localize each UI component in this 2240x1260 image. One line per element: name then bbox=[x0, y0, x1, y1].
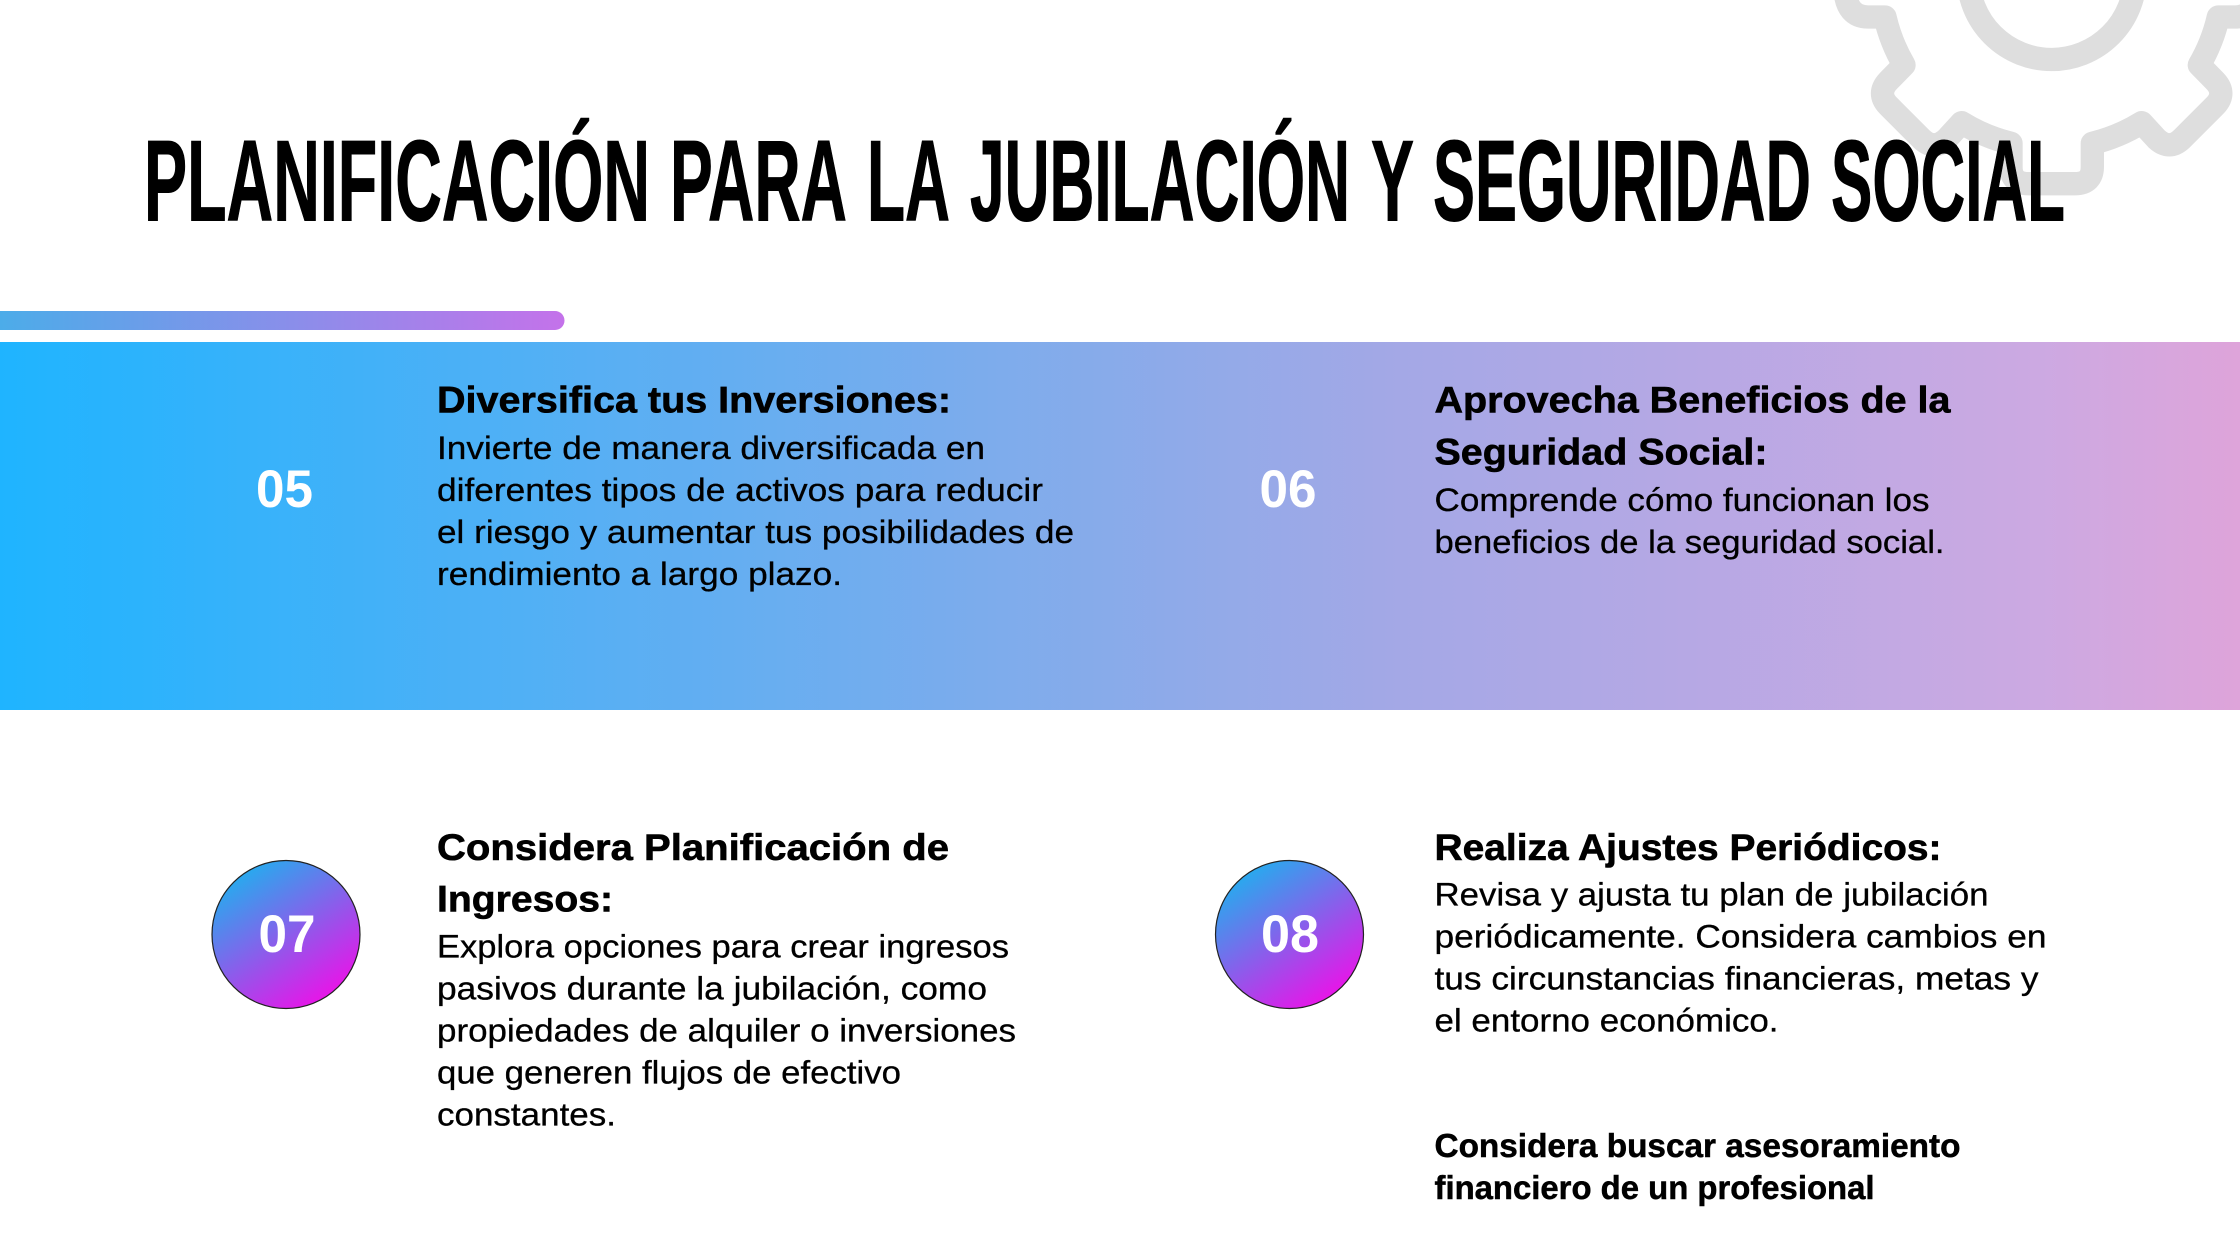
item 08 text bbox=[1434, 827, 2046, 1038]
number 05: 05 bbox=[256, 460, 313, 519]
title: PARA bbox=[670, 118, 847, 246]
body 06: Comprende cómo funcionan los bbox=[1434, 482, 1930, 518]
body 08: tus circunstancias financieras, metas y bbox=[1434, 960, 2038, 996]
badge 08: 08 bbox=[1261, 905, 1319, 964]
body 05: Invierte de manera diversificada en bbox=[437, 430, 985, 466]
heading 06 bbox=[1434, 380, 1951, 472]
heading 05: Diversifica tus Inversiones: bbox=[437, 380, 951, 421]
closing note: financiero de un profesional bbox=[1434, 1169, 1874, 1206]
heading 07: Considera Planificación de bbox=[437, 827, 949, 868]
number 06: 06 bbox=[1260, 460, 1316, 519]
body 08: periódicamente. Considera cambios en bbox=[1434, 918, 2046, 954]
heading 07: Ingresos: bbox=[437, 879, 613, 920]
body 07: Explora opciones para crear ingresos bbox=[437, 928, 1009, 964]
body 06 bbox=[1434, 482, 1944, 560]
item 06 text bbox=[1434, 380, 1951, 560]
closing note bbox=[1434, 1127, 1960, 1206]
body 08: Revisa y ajusta tu plan de jubilación bbox=[1434, 876, 1988, 912]
accent bar bbox=[0, 311, 564, 330]
heading 06: Aprovecha Beneficios de la bbox=[1434, 380, 1951, 421]
body 05: el riesgo y aumentar tus posibilidades de bbox=[437, 514, 1074, 550]
body 08 bbox=[1434, 876, 2046, 1038]
title: JUBILACIÓN bbox=[970, 118, 1350, 246]
heading 08: Realiza Ajustes Periódicos: bbox=[1434, 827, 1942, 868]
title: SEGURIDAD bbox=[1433, 118, 1811, 246]
body 05 bbox=[437, 430, 1074, 592]
icon: gear bbox=[1845, 0, 2240, 184]
heading 06: Seguridad Social: bbox=[1434, 431, 1768, 472]
body 06: beneficios de la seguridad social. bbox=[1434, 524, 1944, 560]
badge 07: 07 bbox=[258, 905, 316, 964]
item 05 text bbox=[437, 380, 1074, 592]
closing note: Considera buscar asesoramiento bbox=[1434, 1127, 1960, 1164]
title bbox=[144, 118, 2065, 246]
body 05: rendimiento a largo plazo. bbox=[437, 556, 842, 592]
panel: gradient band bbox=[0, 342, 2240, 710]
body 07 bbox=[437, 928, 1016, 1132]
body 05: diferentes tipos de activos para reducir bbox=[437, 472, 1043, 508]
title: PLANIFICACIÓN bbox=[144, 118, 650, 246]
body 07: propiedades de alquiler o inversiones bbox=[437, 1012, 1016, 1048]
body 07: pasivos durante la jubilación, como bbox=[437, 970, 987, 1006]
badge 07 bbox=[212, 860, 360, 1008]
heading 07 bbox=[437, 827, 949, 920]
title: LA bbox=[867, 118, 950, 246]
body 08: el entorno económico. bbox=[1434, 1002, 1778, 1038]
item 07 text bbox=[437, 827, 1016, 1132]
body 07: constantes. bbox=[437, 1096, 616, 1132]
body 07: que generen flujos de efectivo bbox=[437, 1054, 901, 1090]
title: Y bbox=[1371, 118, 1414, 246]
badge 08 bbox=[1216, 860, 1364, 1008]
